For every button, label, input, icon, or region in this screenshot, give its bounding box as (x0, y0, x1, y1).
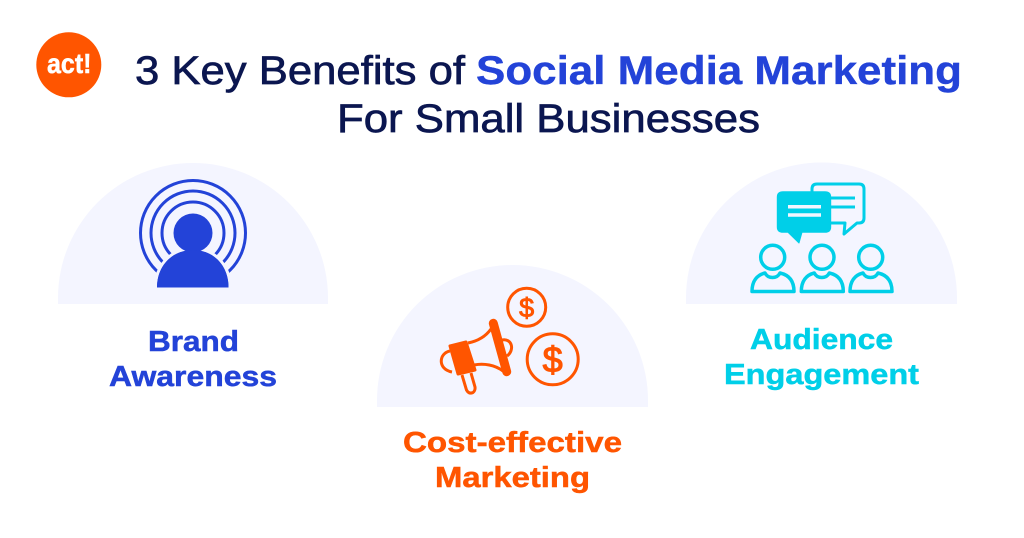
icon: megaphone and coins (441, 288, 578, 393)
logo: act!: act! (47, 48, 92, 79)
panel: cost-effective marketing (377, 265, 648, 494)
title: For Small Businesses (337, 97, 760, 141)
label: Audience Engagement (724, 324, 919, 391)
panel: audience engagement (686, 162, 957, 391)
label: Audience Engagement: Engagement (724, 359, 919, 391)
panel: brand awareness (58, 163, 328, 393)
label: Brand Awareness (109, 326, 277, 393)
title: Social Media Marketing (476, 49, 962, 93)
label: Cost-effective Marketing (403, 427, 622, 494)
logo: act! (36, 32, 101, 97)
icon: megaphone and coins: $ (519, 293, 534, 323)
label: Cost-effective Marketing: Cost-effective (403, 427, 622, 459)
panel background (377, 265, 648, 407)
title (135, 49, 962, 141)
panel background (686, 162, 957, 304)
icon: audience with speech bubbles (752, 184, 892, 292)
title: 3 Key Benefits of (135, 49, 466, 93)
label: Cost-effective Marketing: Marketing (435, 462, 590, 494)
icon: person broadcasting (140, 180, 246, 297)
label: Audience Engagement: Audience (750, 324, 893, 356)
icon: megaphone and coins: $ (543, 339, 563, 380)
panel background (58, 163, 328, 304)
label: Brand Awareness: Brand (148, 326, 239, 358)
label: Brand Awareness: Awareness (109, 361, 277, 393)
